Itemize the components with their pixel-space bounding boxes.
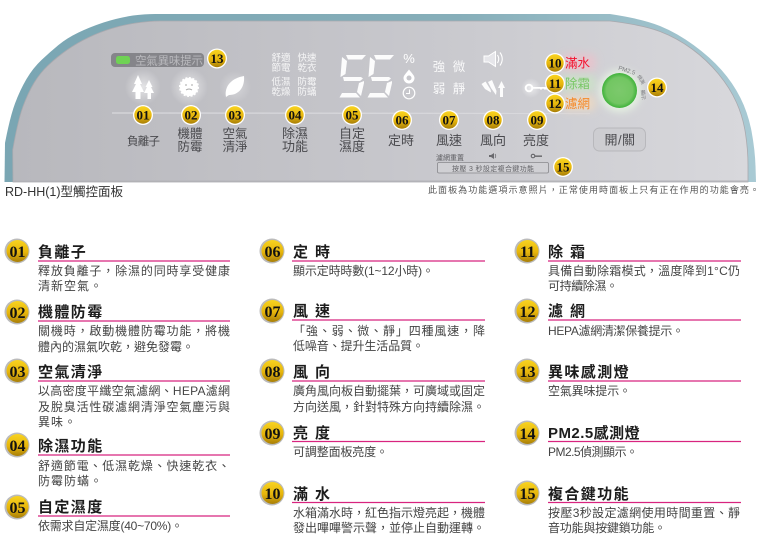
panel: touch control panel [4, 14, 756, 182]
dehumidify mode labels: 快速 [297, 52, 317, 64]
item 01: 釋放負離子，除濕的同時享受健康 [38, 263, 230, 278]
item 10: 10 [264, 486, 280, 503]
item 05: 自定濕度 [38, 498, 104, 516]
icon: air clean leaf [219, 71, 251, 103]
item 11: 11 [520, 244, 535, 261]
item 15 [514, 480, 741, 534]
dehumidify mode labels: 防霉 [297, 76, 317, 88]
power button: 開/關 [604, 132, 636, 148]
odor indicator: 空氣異味提示 [135, 54, 203, 68]
item 08: 08 [264, 364, 280, 381]
item 03: 03 [10, 364, 26, 381]
item 09: 亮度 [293, 424, 337, 442]
panel disclaimer note: 此面板為功能選項示意照片，正常使用時面板上只有正在作用的功能會亮。 [428, 184, 759, 195]
panel function labels: 自定 [339, 126, 365, 141]
panel badges [133, 48, 667, 177]
item 06: 定時 [293, 243, 337, 261]
item 12: 12 [520, 304, 536, 321]
item 10: 滿水 [293, 485, 337, 503]
status lamp labels: 除霜 [565, 76, 590, 91]
panel badges: 15 [556, 160, 570, 174]
combination key area: 濾網重置 [436, 153, 464, 162]
item 10: 水箱滿水時，紅色指示燈亮起，機體 [293, 505, 485, 520]
item 13: 異味感測燈 [548, 363, 630, 381]
item 09 [260, 420, 485, 459]
panel function labels: 亮度 [523, 133, 549, 148]
panel caption: RD-HH(1)型觸控面板 [5, 184, 123, 199]
panel badges: 04 [288, 108, 302, 122]
item 01 [4, 238, 230, 293]
item 03: 以高密度平纖空氣濾網、HEPA濾網 [38, 383, 230, 398]
seven segment display 55 [340, 55, 394, 98]
item 03: 空氣清淨 [38, 363, 104, 381]
item 10 [260, 480, 485, 534]
item 08 [260, 358, 485, 414]
panel badges: 14 [650, 80, 664, 95]
item 07: 風速 [293, 303, 337, 320]
dehumidify mode labels: 節電 [271, 62, 291, 74]
item 03 [4, 358, 230, 429]
item 12: HEPA濾網清潔保養提示。 [548, 323, 684, 338]
item 02 [4, 300, 230, 354]
panel badges: 05 [346, 108, 359, 122]
item 04: 防霉防蟎。 [38, 473, 102, 488]
status lamp labels: 滿水 [565, 56, 591, 70]
item 04: 舒適節電、低濕乾燥、快速乾衣、 [38, 458, 230, 473]
panel function labels [127, 126, 549, 154]
panel badges: 13 [210, 51, 224, 66]
icons: percent, drop, clock [403, 51, 415, 99]
panel badges: 09 [530, 112, 544, 128]
odor indicator [111, 53, 204, 68]
item 11: 除霜 [548, 243, 592, 261]
wind speed labels: 微 [453, 59, 466, 74]
item 14: PM2.5偵測顯示。 [548, 445, 638, 459]
item 14: 14 [520, 426, 536, 443]
panel function labels: 空氣 [222, 126, 248, 141]
item 13: 13 [520, 364, 536, 381]
dehumidify mode labels: 防蟎 [297, 86, 317, 98]
panel badges: 07 [442, 112, 456, 128]
item 04: 04 [10, 438, 26, 455]
item 03: 及脫臭活性碳濾網清淨空氣塵污與 [38, 399, 230, 414]
panel function labels: 濕度 [339, 139, 365, 154]
item 01: 負離子 [38, 243, 87, 261]
item 07 [260, 298, 485, 353]
item 02: 關機時，啟動機體防霉功能，將機 [38, 323, 230, 338]
icon: speaker [484, 52, 502, 66]
item 02: 體內的濕氣吹乾，避免發霉。 [38, 339, 194, 354]
PM2.5 indicator lamp [599, 66, 646, 112]
status lamp labels [562, 54, 596, 111]
item 08: 方向送風，針對特殊方向持續除濕。 [293, 399, 485, 414]
panel function labels: 風速 [436, 133, 462, 148]
wind speed labels [433, 59, 466, 96]
item 05: 05 [10, 500, 26, 517]
icon: body mould-proof sun [170, 68, 208, 106]
item 05: 依需求自定濕度(40~70%)。 [38, 518, 183, 533]
item 15: 15 [520, 486, 536, 503]
item 11: 具備自動除霜模式，溫度降到1°C仍 [548, 263, 740, 278]
panel function labels: 風向 [480, 133, 506, 148]
item 02: 02 [10, 305, 26, 322]
panel function labels: 清淨 [222, 140, 248, 154]
icon: key [521, 78, 547, 98]
dehumidify mode labels: 低濕 [271, 76, 291, 88]
item 08: 風向 [293, 364, 337, 381]
wind speed labels: 弱 [433, 82, 445, 96]
panel badges: 12 [548, 96, 562, 111]
combination key area: 按壓 3 秒設定複合鍵功能 [452, 164, 534, 173]
item 15: 複合鍵功能 [548, 485, 630, 503]
PM2.5 indicator lamp: 顯示 [639, 90, 646, 100]
item 13 [514, 358, 741, 398]
item 05 [4, 494, 230, 533]
item 06 [260, 238, 485, 278]
panel function labels: 負離子 [127, 134, 160, 148]
item 03: 異味。 [38, 415, 76, 429]
icon: negative ions trees [125, 69, 161, 105]
item 11 [514, 238, 741, 293]
item 13: 空氣異味提示。 [548, 383, 631, 398]
item 11: 可持續除濕。 [548, 278, 618, 293]
item 07: 低噪音、提升生活品質。 [293, 338, 424, 353]
item 08: 廣角風向板自動擺葉，可廣域或固定 [293, 383, 485, 398]
status lamp labels: 濾網 [565, 96, 590, 111]
item 04: 除濕功能 [38, 437, 104, 455]
panel function labels: 防霉 [177, 139, 203, 154]
panel function labels: 機體 [177, 126, 203, 141]
dehumidify mode labels: 舒適 [271, 52, 291, 64]
item 07: 07 [264, 304, 280, 321]
item 01: 清新空氣。 [38, 278, 102, 293]
panel badges: 06 [396, 112, 409, 128]
panel badges: 11 [549, 76, 561, 91]
dehumidify mode labels: 乾衣 [297, 62, 317, 74]
item 14: PM2.5感測燈 [548, 424, 641, 442]
power button [594, 128, 646, 151]
panel badges: 03 [228, 108, 242, 122]
item 02: 機體防霉 [38, 303, 104, 321]
wind speed labels: 靜 [453, 82, 466, 96]
item 01: 01 [10, 244, 26, 261]
wind speed labels: 強 [433, 60, 446, 74]
item 09: 09 [264, 426, 280, 443]
item 06: 顯示定時時數(1~12小時)。 [293, 263, 434, 278]
PM2.5 indicator lamp: 偵測 [635, 74, 646, 86]
icons: percent, drop, clock: % [403, 51, 415, 66]
dehumidify mode labels [271, 52, 317, 98]
item 14 [514, 420, 741, 459]
panel badges: 01 [136, 108, 150, 122]
item 15: 按壓3秒設定濾網使用時間重置、靜 [548, 505, 740, 520]
icon: wind direction arrows [482, 80, 505, 97]
item 07: 「強、弱、微、靜」四種風速，降 [293, 323, 485, 338]
item 09: 可調整面板亮度。 [293, 444, 388, 459]
panel badges: 02 [184, 108, 198, 122]
panel function labels: 除濕 [282, 126, 308, 141]
panel function labels: 定時 [388, 133, 414, 148]
panel badges: 08 [486, 112, 500, 128]
item 12: 濾網 [548, 302, 592, 320]
combination key area [436, 153, 548, 173]
item 12 [514, 298, 741, 338]
dehumidify mode labels: 乾燥 [271, 86, 291, 98]
item 04 [4, 432, 230, 488]
panel badges: 10 [548, 56, 562, 70]
PM2.5 indicator lamp: PM2.5 [617, 66, 636, 77]
panel function labels: 功能 [282, 139, 308, 154]
item 06: 06 [264, 244, 280, 261]
